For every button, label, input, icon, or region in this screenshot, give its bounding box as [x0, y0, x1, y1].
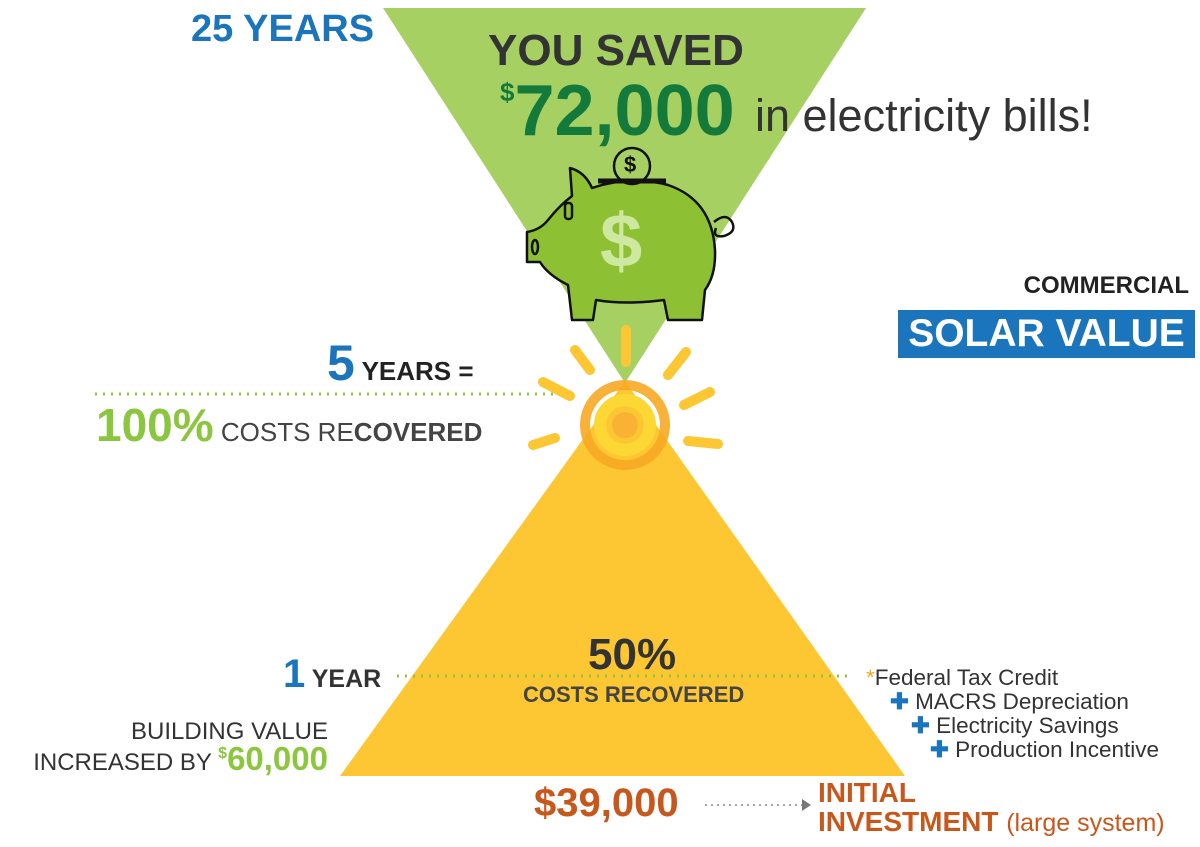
text: $ [624, 152, 636, 177]
building value [33, 718, 328, 777]
building value: BUILDING VALUE [131, 718, 328, 745]
list: incentives: *Federal Tax Credit [866, 665, 1058, 690]
title: you saved: YOU SAVED [488, 26, 744, 75]
icon: sun [533, 330, 718, 510]
dotted line 1 year [397, 674, 850, 678]
initial investment amount: $39,000 [534, 781, 679, 825]
brand title [898, 272, 1195, 358]
initial investment label: INITIAL [818, 777, 916, 808]
savings amount: $72,000 [500, 71, 735, 151]
text: in electricity bills! [755, 90, 1093, 141]
label: 100% costs recovered: 100% COSTS RECOVERED [96, 399, 482, 451]
list: incentives: ✚ MACRS Depreciation [890, 689, 1129, 714]
list: incentives: ✚ Electricity Savings [911, 713, 1119, 738]
brand title: COMMERCIAL [1024, 272, 1189, 299]
green inverted triangle [383, 8, 866, 383]
initial investment label [818, 777, 1165, 837]
text: COSTS RECOVERED [523, 682, 744, 707]
label: 5 years: 5 YEARS = [327, 335, 474, 391]
arrow: dotted to initial investment [705, 799, 811, 811]
building value: INCREASED BY $60,000 [33, 740, 328, 777]
label: 50%: 50% [588, 630, 676, 679]
label: 1 year: 1 YEAR [283, 652, 381, 696]
icon: piggy bank [527, 148, 733, 320]
dotted line 5 years [95, 392, 560, 396]
initial investment label: INVESTMENT (large system) [818, 806, 1165, 837]
label: 25 years: 25 YEARS [191, 8, 374, 50]
list: incentives [866, 665, 1159, 762]
list: incentives: ✚ Production Incentive [930, 737, 1159, 762]
dollar sign on piggy: $ [600, 199, 642, 284]
brand title: SOLAR VALUE [908, 312, 1185, 355]
yellow triangle [340, 381, 905, 776]
